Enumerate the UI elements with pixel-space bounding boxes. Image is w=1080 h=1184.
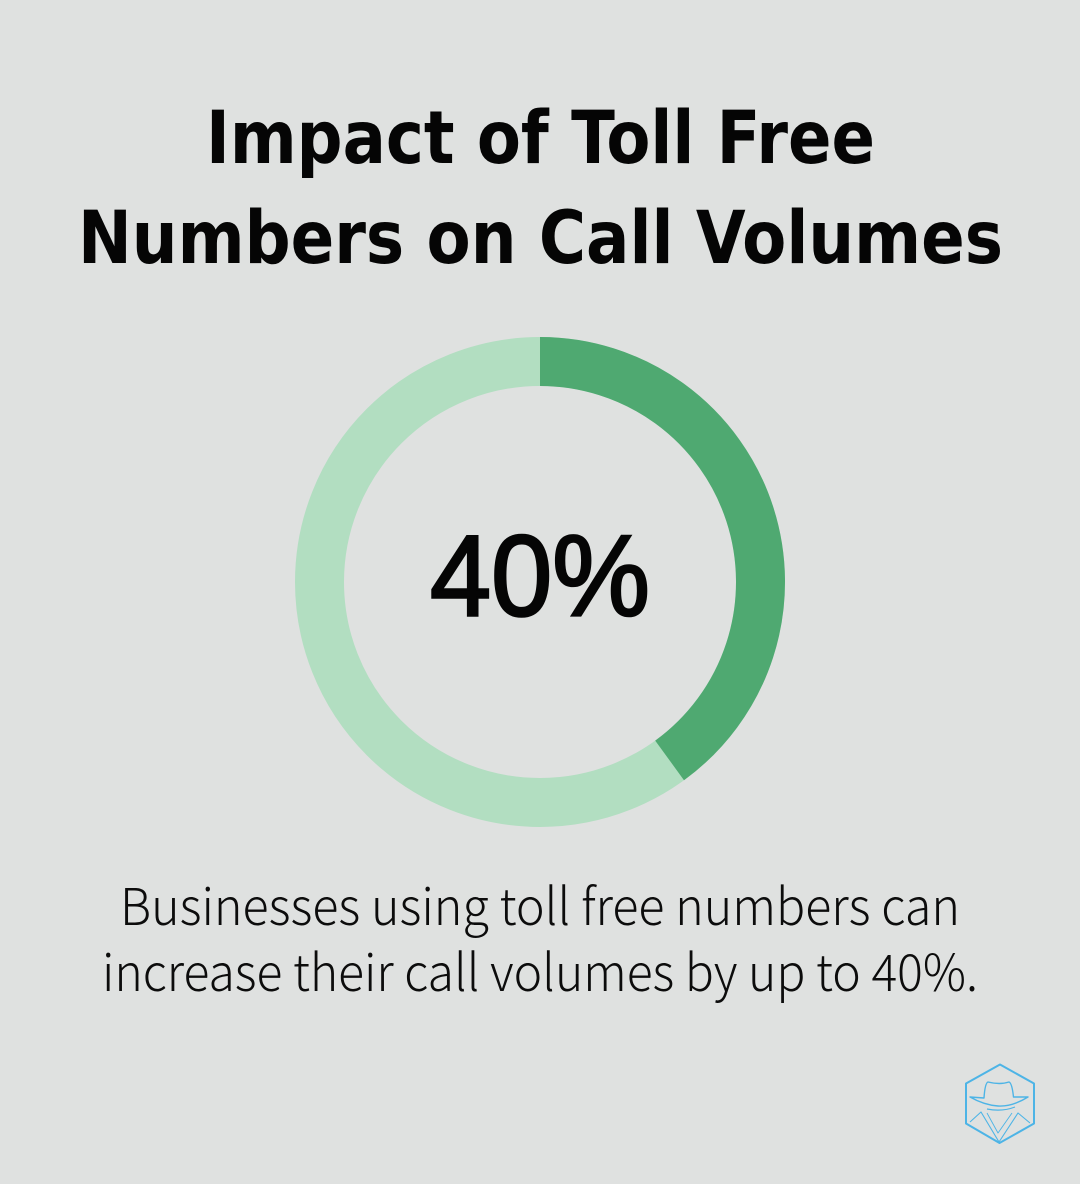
description text: Businesses using toll free numbers can [120,866,960,940]
title: Impact of Toll Free [206,96,875,181]
description text: increase their call volumes by up to 40%. [102,932,978,1006]
title [78,96,1003,281]
donut chart: 40% [320,362,761,802]
icon: hexagon logo with hat spy [966,1064,1034,1143]
description text [102,866,978,1006]
center value: 40% [430,512,650,640]
